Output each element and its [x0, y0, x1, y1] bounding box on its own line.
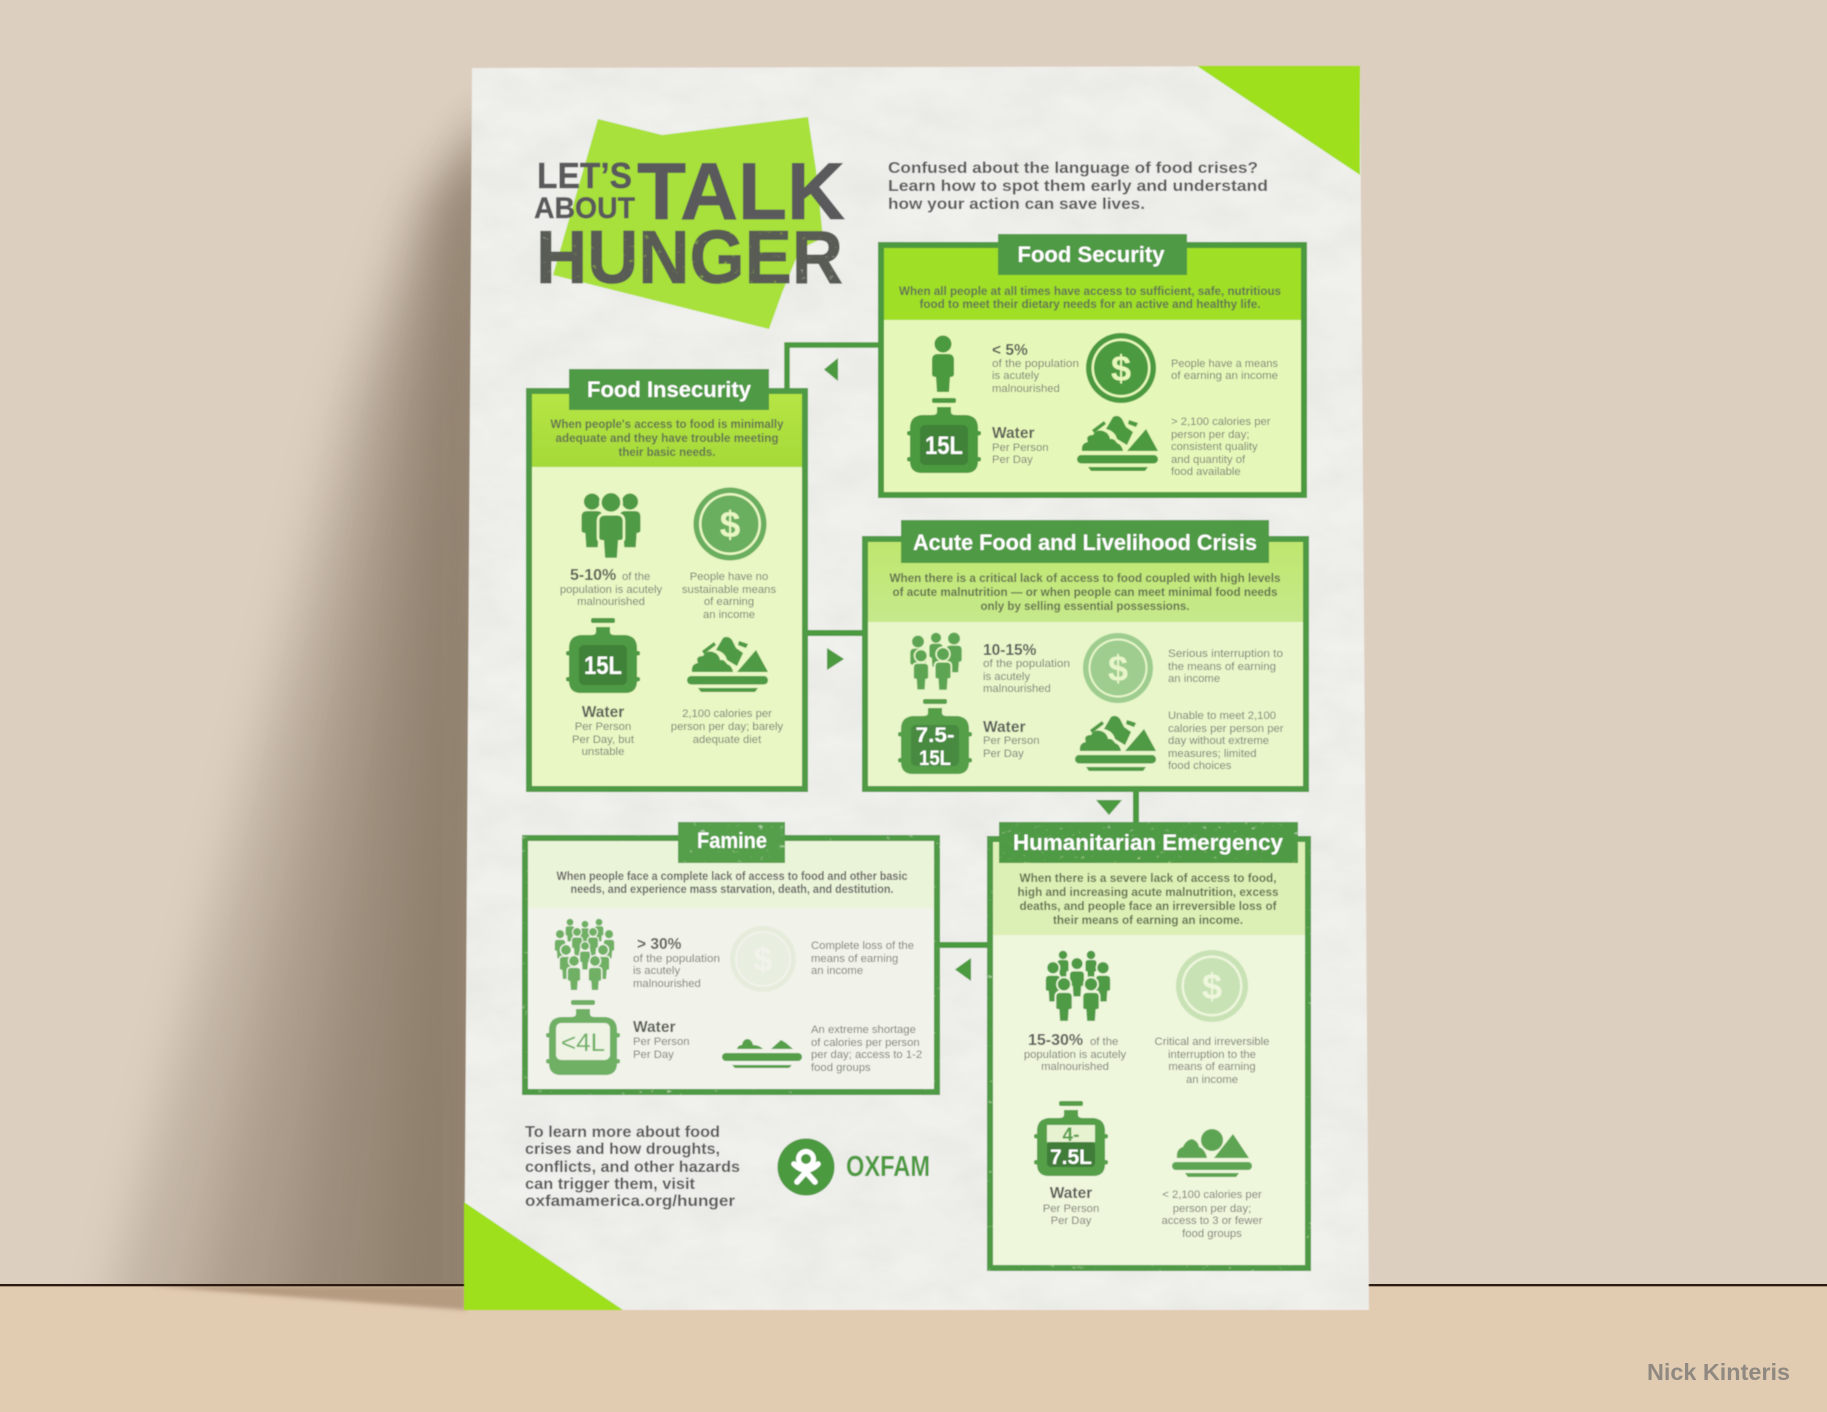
call to action text	[525, 1124, 740, 1210]
heading: Humanitarian Emergency	[1013, 830, 1284, 855]
call to action text: crises and how droughts,	[525, 1141, 720, 1158]
calories text: calories per person per	[1168, 723, 1284, 735]
water text: Per Day	[983, 748, 1024, 760]
poster shadow on wall	[102, 109, 472, 1284]
water text: Water	[1050, 1185, 1092, 1202]
income text: Complete loss of the	[811, 940, 914, 952]
title TALK: TALK	[637, 147, 845, 237]
malnourished stat: population is acutely	[1024, 1049, 1127, 1061]
malnourished stat	[992, 342, 1079, 395]
icon: coin: $	[720, 504, 741, 545]
description: When people's access to food is minimally	[550, 419, 784, 431]
title LET'S: LET’S	[537, 155, 632, 196]
income text: Critical and irreversible	[1155, 1036, 1269, 1048]
calories text: food available	[1171, 466, 1241, 478]
income text	[811, 940, 914, 977]
calories text: food groups	[1182, 1228, 1242, 1240]
panel fill	[525, 838, 937, 1092]
malnourished stat: < 5%	[992, 342, 1028, 359]
income text: interruption to the	[1168, 1049, 1256, 1061]
income text: People have a means	[1171, 358, 1278, 370]
malnourished stat: of the	[622, 571, 650, 583]
income text: an income	[703, 609, 755, 621]
poster shadow on floor	[150, 1286, 466, 1310]
income text: Serious interruption to	[1168, 648, 1283, 660]
icon: coin: $	[1108, 648, 1128, 689]
icon: person	[932, 336, 954, 392]
description: adequate and they have trouble meeting	[556, 433, 778, 445]
connector: humanitarian emergency to famine	[938, 942, 988, 981]
logo mark	[778, 1138, 834, 1196]
logo wordmark: OXFAM	[846, 1151, 930, 1183]
malnourished stat: 10-15%	[983, 642, 1037, 659]
description	[890, 573, 1280, 613]
icon: water bottle 15L: 15L	[584, 652, 622, 680]
title HUNGER: HUNGER	[536, 215, 843, 299]
title block	[534, 117, 845, 329]
description: When there is a severe lack of access to food,	[1020, 873, 1276, 885]
water text: Per Person	[575, 721, 631, 733]
calories text: per day; access to 1-2	[811, 1049, 922, 1061]
income text	[1168, 648, 1283, 685]
malnourished stat: 15-30%	[1028, 1032, 1083, 1049]
icon: water bottle 7.5-15L	[898, 699, 972, 774]
icon: coin: $	[754, 941, 773, 979]
malnourished stat: of the population	[633, 953, 720, 965]
heading: Food Security	[1018, 242, 1165, 267]
calories text: food groups	[811, 1062, 871, 1074]
icon: coin	[730, 926, 796, 992]
description	[1018, 873, 1278, 927]
malnourished stat: population is acutely	[560, 584, 663, 596]
water text: Per Day	[633, 1049, 674, 1061]
icon: water bottle 15L	[566, 618, 640, 693]
description	[556, 871, 908, 896]
calories text: and quantity of	[1171, 454, 1246, 466]
intro text: Learn how to spot them early and understand	[888, 178, 1268, 195]
panel: acute food and livelihood crisis	[865, 520, 1306, 789]
description: of acute malnutrition — or when people can meet minimal food needs	[892, 587, 1278, 599]
calories text	[1171, 416, 1271, 478]
calories text	[1168, 710, 1284, 772]
malnourished stat: of the	[1090, 1036, 1118, 1048]
Oxfam logo	[778, 1138, 930, 1196]
icon: food plate	[687, 637, 768, 692]
malnourished stat: of the population	[983, 658, 1070, 670]
calories text: consistent quality	[1171, 441, 1258, 453]
title green shape	[553, 117, 823, 329]
water text: Per Person	[992, 442, 1049, 454]
heading: Famine	[697, 828, 767, 853]
water text: Water	[983, 719, 1026, 736]
connector: food security to food insecurity	[787, 345, 878, 392]
icon: food plate	[1075, 716, 1156, 771]
malnourished stat: is acutely	[992, 370, 1039, 382]
call to action text: oxfamamerica.org/hunger	[525, 1193, 735, 1210]
wall-floor line	[0, 1284, 1827, 1286]
water text	[992, 425, 1049, 466]
description: needs, and experience mass starvation, death, and destitution.	[570, 884, 894, 896]
malnourished stat: is acutely	[633, 965, 680, 977]
malnourished stat	[1024, 1032, 1127, 1073]
water text	[983, 719, 1040, 760]
calories text: person per day;	[1171, 429, 1250, 441]
water text: Water	[992, 425, 1034, 442]
corner triangle top right	[1197, 66, 1360, 175]
panel frame	[990, 839, 1308, 1268]
icon: large crowd of people	[554, 919, 615, 991]
watermark credit: Nick Kinteris	[1647, 1359, 1790, 1385]
income text	[682, 571, 776, 621]
panel: food insecurity	[529, 369, 805, 789]
panel fill	[990, 839, 1308, 1268]
icon: water bottle 7.5-15L: 15L	[919, 747, 951, 770]
calories text: adequate diet	[693, 734, 762, 746]
icon: water bottle 15L	[907, 398, 981, 473]
icon: coin	[1086, 333, 1156, 403]
water text: Per Day	[992, 454, 1033, 466]
income text: an income	[811, 965, 863, 977]
icon: coin: $	[1202, 966, 1222, 1007]
connector: acute crisis to humanitarian emergency	[1096, 790, 1139, 824]
intro text: how your action can save lives.	[888, 196, 1145, 213]
income text: People have no	[690, 571, 768, 583]
calories text: of calories per person	[811, 1037, 920, 1049]
description: When people face a complete lack of access to food and other basic	[556, 871, 908, 883]
calories text: > 2,100 calories per	[1171, 416, 1271, 428]
title ABOUT: ABOUT	[534, 192, 635, 225]
call to action text: conflicts, and other hazards	[525, 1159, 740, 1176]
heading: Acute Food and Livelihood Crisis	[913, 530, 1257, 555]
description	[550, 419, 784, 459]
income text: means of earning	[811, 953, 898, 965]
panel: food security	[881, 234, 1304, 495]
calories text: person per day; barely	[671, 721, 784, 733]
malnourished stat: > 30%	[637, 936, 682, 953]
calories text: access to 3 or fewer	[1161, 1215, 1263, 1227]
intro text	[888, 160, 1268, 213]
malnourished stat	[560, 567, 663, 608]
income text: sustainable means	[682, 584, 776, 596]
water text: Water	[633, 1019, 676, 1036]
water text	[633, 1019, 690, 1061]
water text: Per Person	[983, 735, 1040, 747]
connector: food insecurity to acute crisis	[806, 630, 864, 670]
description: deaths, and people face an irreversible loss of	[1020, 901, 1277, 913]
icon: water bottle under 4L	[546, 1000, 620, 1075]
water text: Per Person	[1043, 1203, 1099, 1215]
malnourished stat: malnourished	[992, 383, 1060, 395]
calories text: < 2,100 calories per	[1162, 1189, 1262, 1201]
calories text: food choices	[1168, 760, 1232, 772]
water text: Per Day	[1051, 1215, 1092, 1227]
water text: Water	[582, 704, 624, 721]
malnourished stat	[633, 936, 720, 990]
panel frame	[529, 391, 805, 789]
icon: food plate	[1172, 1129, 1252, 1177]
description: food to meet their dietary needs for an active and healthy life.	[920, 299, 1260, 311]
calories text: Unable to meet 2,100	[1168, 710, 1276, 722]
heading tab	[678, 822, 785, 863]
income text	[1155, 1036, 1269, 1086]
malnourished stat: malnourished	[1041, 1061, 1109, 1073]
calories text: An extreme shortage	[811, 1024, 916, 1036]
calories text	[671, 708, 784, 746]
calories text: person per day;	[1173, 1203, 1251, 1215]
income text: the means of earning	[1168, 661, 1276, 673]
malnourished stat: of the population	[992, 358, 1079, 370]
icon: water bottle 4-7.5L: 7.5L	[1050, 1146, 1092, 1169]
water text	[1043, 1185, 1099, 1227]
description: their means of earning an income.	[1053, 915, 1243, 927]
description	[899, 286, 1281, 311]
corner triangle bottom left	[464, 1202, 623, 1310]
description: high and increasing acute malnutrition, excess	[1018, 887, 1278, 899]
panel: famine	[525, 822, 937, 1092]
calories text: measures; limited	[1168, 748, 1257, 760]
income text: of earning an income	[1171, 370, 1278, 382]
description: When all people at all times have access to sufficient, safe, nutritious	[899, 286, 1281, 298]
description: When there is a critical lack of access to food coupled with high levels	[890, 573, 1280, 585]
calories text: day without extreme	[1168, 735, 1269, 747]
malnourished stat: is acutely	[983, 671, 1030, 683]
icon: coin: $	[1111, 348, 1131, 389]
panel: humanitarian emergency	[990, 822, 1308, 1268]
icon: group of people	[910, 633, 962, 691]
icon: food plate small	[722, 1039, 802, 1068]
water text: unstable	[582, 746, 624, 758]
income text: of earning	[704, 596, 754, 608]
icon: coin	[1083, 633, 1153, 703]
calories text: 2,100 calories per	[682, 708, 772, 720]
panel frame	[881, 245, 1304, 495]
income text: means of earning	[1168, 1061, 1256, 1073]
description: their basic needs.	[618, 447, 716, 459]
icon: three people	[582, 492, 640, 559]
income text	[1171, 358, 1278, 382]
heading tab	[998, 234, 1187, 275]
icon: coin	[1176, 950, 1248, 1022]
icon: water bottle under 4L: <4L	[561, 1029, 605, 1057]
poster paper	[464, 66, 1369, 1310]
malnourished stat: 5-10%	[570, 567, 616, 584]
paper texture	[464, 66, 1369, 1310]
description: only by selling essential possessions.	[980, 601, 1190, 613]
icon: coin	[694, 488, 766, 560]
icon: water bottle 4-7.5L	[1034, 1101, 1108, 1176]
call to action text: To learn more about food	[525, 1124, 720, 1141]
icon: food plate	[1077, 416, 1158, 471]
intro text: Confused about the language of food crises?	[888, 160, 1258, 177]
malnourished stat: malnourished	[633, 978, 701, 990]
icon: water bottle 7.5-15L: 7.5-	[916, 724, 955, 747]
floor background	[0, 1286, 1827, 1412]
malnourished stat: malnourished	[577, 596, 645, 608]
water text: Per Day, but	[572, 734, 635, 746]
calories text	[1161, 1189, 1263, 1240]
icon: water bottle 15L: 15L	[925, 432, 963, 460]
panel frame	[525, 838, 937, 1092]
heading tab	[569, 369, 769, 410]
icon: water bottle 4-7.5L: 4-	[1063, 1125, 1079, 1146]
call to action text: can trigger them, visit	[525, 1176, 695, 1193]
heading tab	[901, 520, 1269, 563]
malnourished stat	[983, 642, 1070, 695]
panel frame	[865, 539, 1306, 789]
income text: an income	[1168, 673, 1220, 685]
poster	[464, 66, 1369, 1310]
heading tab	[999, 822, 1298, 863]
icon: crowd of people	[1045, 951, 1111, 1022]
calories text	[811, 1024, 922, 1074]
heading: Food Insecurity	[587, 377, 752, 402]
water text	[572, 704, 635, 758]
water text: Per Person	[633, 1036, 690, 1048]
malnourished stat: malnourished	[983, 683, 1051, 695]
income text: an income	[1186, 1074, 1238, 1086]
